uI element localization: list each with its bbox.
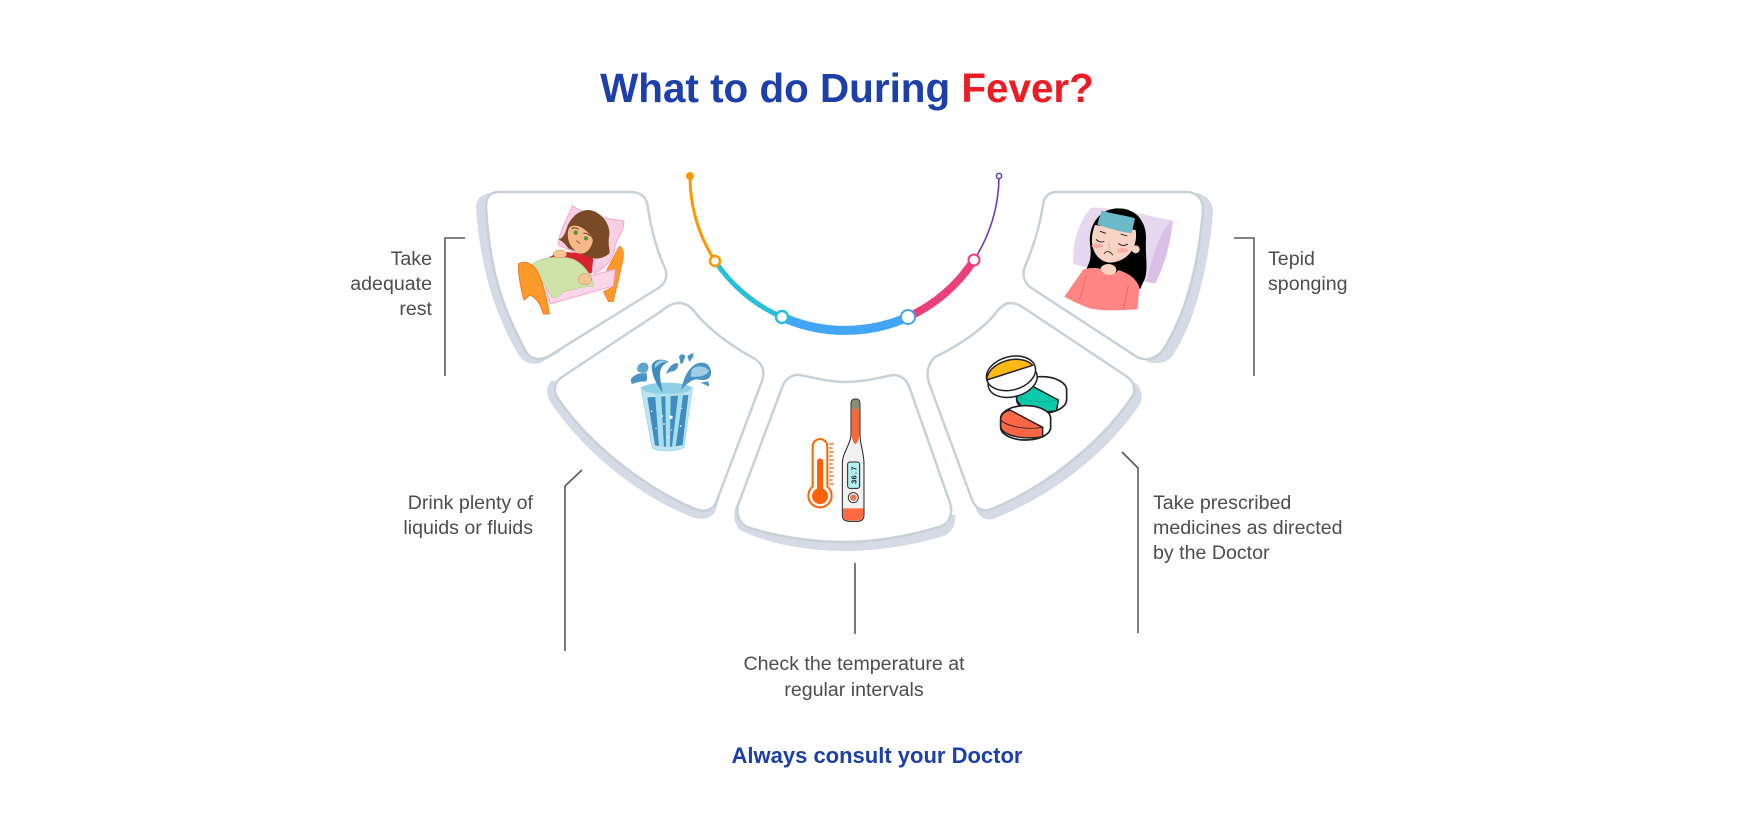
panel: drink fluids — [547, 303, 763, 519]
callout: tepid sponging: Tepid — [1268, 248, 1315, 270]
callout: check temperature: regular intervals — [784, 679, 924, 701]
panel: tepid sponging — [1024, 192, 1213, 363]
panel: check temperature — [734, 375, 955, 551]
callout: take adequate rest — [350, 238, 465, 376]
icon: pills — [983, 351, 1067, 440]
panel: prescribed medicines — [928, 303, 1142, 520]
panel: take adequate rest — [476, 192, 666, 364]
callout: take adequate rest: adequate — [350, 273, 432, 295]
semicircle progress arc — [686, 172, 1002, 330]
callout: take adequate rest: Take — [391, 248, 432, 270]
callout: tepid sponging: sponging — [1268, 273, 1348, 295]
callout: check temperature: Check the temperature at — [743, 653, 965, 675]
callout: take adequate rest: rest — [399, 298, 433, 320]
callout: prescribed medicines: by the Doctor — [1153, 542, 1270, 564]
icon: glass of water — [631, 353, 711, 451]
callout: drink liquids: liquids or fluids — [403, 517, 533, 539]
callout: prescribed medicines: Take prescribed — [1153, 492, 1291, 514]
callout: prescribed medicines: medicines as directed — [1153, 517, 1342, 539]
callout: prescribed medicines — [1122, 452, 1342, 633]
callout: drink liquids: Drink plenty of — [408, 492, 534, 514]
callout: check temperature — [743, 563, 965, 701]
icon: girl resting in bed — [518, 206, 624, 314]
callout: tepid sponging — [1234, 238, 1348, 376]
icon: thermometers — [808, 399, 864, 521]
footer note: Always consult your Doctor — [732, 743, 1023, 768]
icon: woman with cold compress — [1064, 207, 1173, 310]
callout: drink liquids — [403, 470, 582, 651]
icon: thermometers: 36.7 — [851, 466, 859, 484]
title: What to do During Fever? — [600, 65, 1094, 111]
